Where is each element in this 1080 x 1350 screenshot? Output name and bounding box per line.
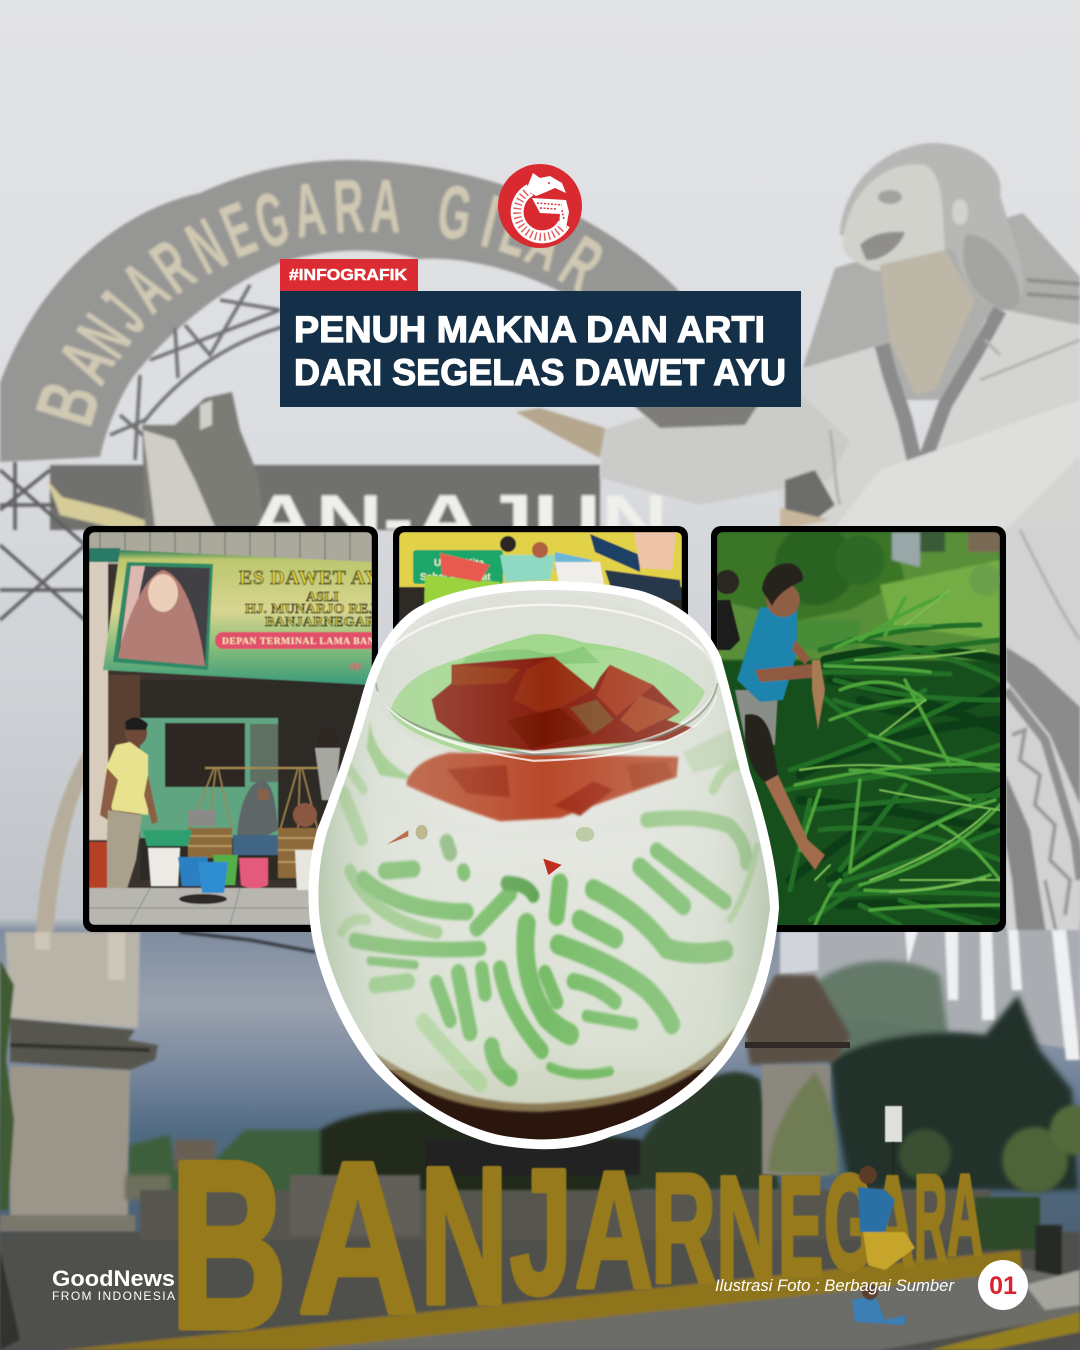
photo card: dawet vendors with packaged drinks [393,526,688,630]
hair [840,143,1023,312]
arch lettering: A [370,163,401,249]
background photo: giant BANJARNEGARA letters: N [420,1128,508,1345]
vendor man in yellow shirt [100,717,158,906]
red jelly seen through the glass [407,753,678,821]
stall roof [89,532,372,564]
arch lettering: R [136,223,209,309]
background photo: children near the letters [852,1166,915,1325]
green panel [413,550,503,584]
neck [880,250,975,395]
tag: #INFOGRAFIK: #INFOGRAFIK [289,267,407,284]
boat-shaped ornament [47,480,165,527]
background photo: giant BANJARNEGARA letters: R [651,1141,716,1315]
banner text: ES DAWET AYU [239,567,394,589]
left wall [89,562,108,840]
kebaya [780,310,1080,535]
arch lettering: J [85,278,161,347]
page number badge [978,1260,1028,1310]
banner text: HJ. MUNARJO REJO [245,602,387,617]
green wall and window [140,718,278,838]
green surface [390,634,705,753]
crossing arm [833,400,1080,535]
lace cuff [785,470,835,520]
background photo: giant BANJARNEGARA letters: R [914,1148,947,1288]
yellow banner [399,532,682,587]
photo card: dawet vendors with packaged drinks: Untuk Kita [434,558,484,569]
plaza name letters on the gate: AN-AJUN [248,481,668,557]
photo card: Es Dawet Ayu stall [83,526,378,932]
arch lettering: G [433,167,477,256]
logo: red circle with white garuda G emblem [498,164,582,248]
second boy at left edge [715,570,740,650]
background photo: giant BANJARNEGARA letters: A [575,1136,653,1323]
arch lettering: N [174,202,239,290]
tower roof [745,975,850,1065]
photo card: dawet vendors with packaged drinks: Sehat & Hemat [420,572,491,583]
banner pink strip [214,631,372,650]
milk surface [360,769,743,843]
carrying baskets and pole [188,768,320,878]
background photo: Banjarnegara gate arch [0,160,680,950]
product packs [423,551,592,604]
face [843,164,945,271]
arch lettering: L [491,184,542,273]
background photo: trees and tower [125,961,1080,1205]
tower column [762,1065,830,1175]
title [280,291,801,407]
background photo: statue of woman dancer [516,143,1080,1040]
banner text: BANJARNEGARA [265,615,387,630]
arch lettering: A [515,197,578,287]
arch lettering: A [43,327,132,397]
arch lettering: I [474,179,507,265]
skirt folds [1006,527,1080,1040]
arch lettering: B [18,372,118,435]
brand: GoodNews from Indonesia [52,1266,175,1303]
photo card: Es Dawet Ayu stall: 09 [350,661,362,673]
dawet ayu glass with white cut-out outline [300,580,800,1165]
arch lettering: R [546,219,617,308]
background photo: giant BANJARNEGARA letters: A [870,1150,915,1293]
background photo: giant BANJARNEGARA letters [170,1113,983,1350]
arch lettering: A [287,165,330,254]
arch lettering: E [210,185,267,274]
background photo: giant BANJARNEGARA letters: A [947,1150,983,1280]
background photo: giant BANJARNEGARA letters: E [778,1146,823,1306]
stall interior [140,680,372,880]
arch lettering: N [61,301,147,371]
people in the background [500,532,682,600]
skin arm [516,408,605,458]
banner portrait [113,562,213,670]
arch lettering: R [331,162,366,249]
background photo: giant BANJARNEGARA letters: G [824,1147,875,1298]
person in grey shirt [314,747,341,801]
banner text: ASLI [306,590,339,605]
background photo: fog band and skirt hem [780,930,1080,1060]
banner text [238,570,372,627]
pale cendol strands at the glass edge [342,764,757,1083]
floor [89,887,310,925]
left sleeve [600,375,850,505]
arch lettering: G [246,175,297,265]
hair bun [963,235,1020,310]
young shrub by the tower [768,1072,838,1175]
arch lettering: A [106,246,184,328]
tree canopy [810,961,1078,1190]
dragon sculpture [142,392,265,527]
stall banner [103,550,372,685]
pandan leaf bundles [785,590,1000,925]
third boy reaching into the leaves [745,714,825,870]
photo credit: Ilustrasi Foto : Berbagai Sumber [715,1277,956,1295]
palm sugar layer [372,1026,736,1140]
red jelly cubes [432,657,693,751]
upper glass wall [376,670,380,680]
plastic buckets and crate [89,830,320,893]
green band below the rim [366,722,410,780]
brand: GoodNews from Indonesia: GoodNews [52,1266,175,1291]
page number badge: 01 [989,1272,1017,1300]
banner pink strip: DEPAN TERMINAL LAMA BANJARNEGARA [222,637,440,647]
background photo: giant BANJARNEGARA letters: J [510,1131,572,1331]
tag: #INFOGRAFIK [280,259,418,291]
boy in blue shirt [735,563,825,745]
arch lettering [18,162,617,435]
glass side shading [310,650,780,1070]
background photo: left pillar [0,932,315,1232]
gate lower bar and lattice [50,465,600,530]
photo card: harvesting pandan leaves [711,525,1006,932]
arch struts [110,285,290,460]
seated woman in grey hijab [233,780,278,855]
background photo: giant BANJARNEGARA letters: N [716,1146,777,1311]
green cendol strands [355,842,725,1077]
title: PENUH MAKNA DAN ARTI [294,309,765,350]
collar [882,345,915,463]
small jelly bits in milk [543,859,562,875]
brand: GoodNews from Indonesia: FROM INDONESIA [52,1289,175,1303]
title: DARI SEGELAS DAWET AYU [294,352,786,393]
milk body [318,590,770,1140]
field background [717,525,1001,660]
glass rim [375,605,717,753]
background photo: ground and plaza [0,1140,1080,1350]
